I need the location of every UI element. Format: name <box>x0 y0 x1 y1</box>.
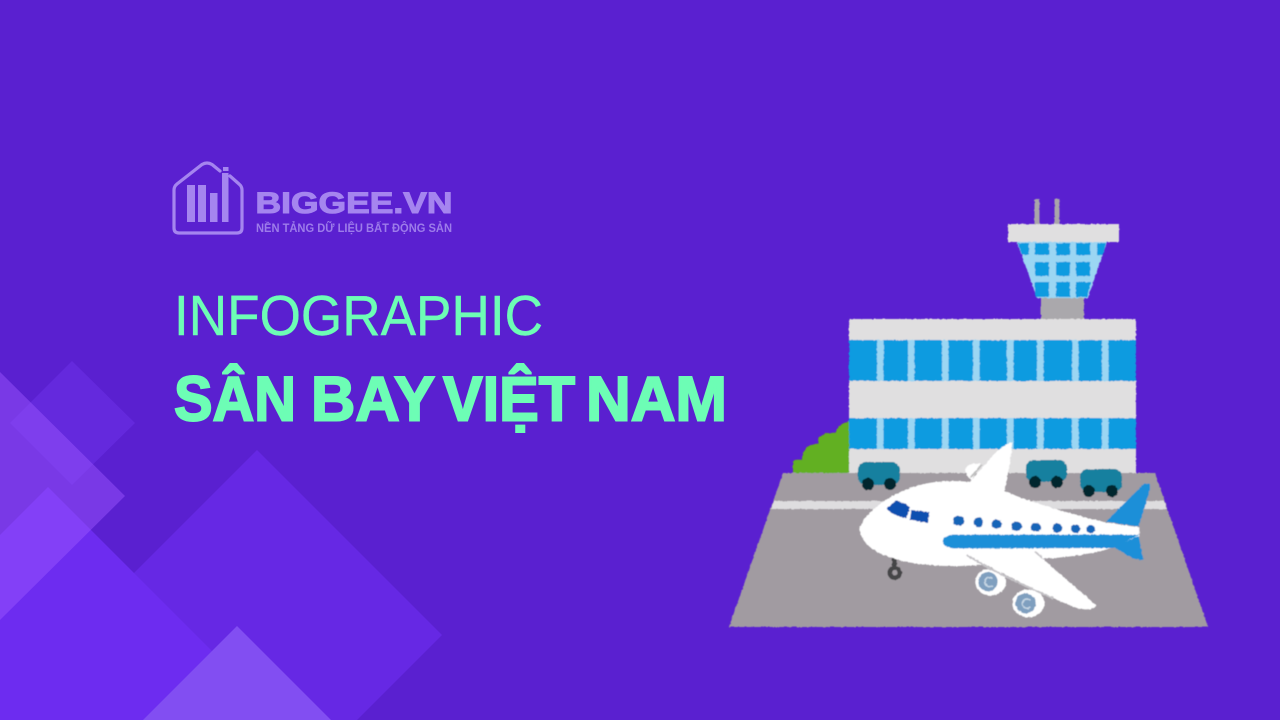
title line: infographic: INFOGRAPHIC <box>174 284 543 347</box>
far wing <box>965 443 1012 495</box>
airplane <box>859 443 1150 617</box>
title line: sân bay việt nam: BAY <box>311 364 435 434</box>
apron <box>729 473 1208 627</box>
tail fins <box>1106 483 1150 560</box>
landing gear <box>890 558 900 578</box>
fuselage stripe <box>943 535 1139 548</box>
logo tagline: NỀN TẢNG DỮ LIỆU BẤT ĐỘNG SẢN <box>256 222 452 235</box>
cabin windows <box>953 516 1095 533</box>
fuselage <box>859 481 1139 566</box>
shrub <box>793 421 850 473</box>
logo icon: house with bars <box>174 163 242 233</box>
logo wordmark: BIGGEE.VN <box>256 187 452 220</box>
control tower <box>1008 199 1119 320</box>
title line: sân bay việt nam: NAM <box>586 364 727 434</box>
cockpit windows <box>887 501 929 523</box>
title line: sân bay việt nam: SÂN <box>174 364 296 434</box>
title line: sân bay việt nam <box>174 364 727 434</box>
vehicles <box>858 460 1122 497</box>
engines <box>975 569 1044 617</box>
near wing <box>967 551 1096 609</box>
title line: sân bay việt nam: VIỆT <box>443 364 575 434</box>
terminal building <box>849 319 1136 474</box>
